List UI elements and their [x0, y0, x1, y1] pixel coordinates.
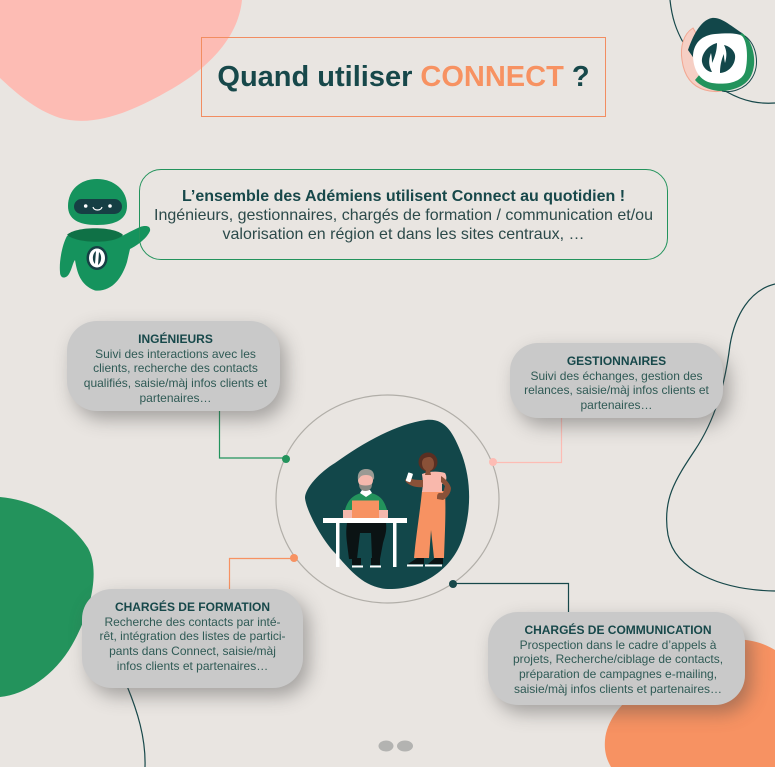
illustration: team at desk [305, 420, 469, 589]
seated man [343, 469, 388, 568]
robot badge [86, 246, 108, 270]
card: gestionnaires: GESTIONNAIRES [567, 354, 666, 368]
card: chargés de communication: Prospection dans le cadre d’appels à [520, 638, 716, 652]
blob: orange bottom right [605, 640, 775, 767]
connector: chargés de communication [449, 580, 568, 612]
card: gestionnaires: partenaires… [580, 398, 653, 412]
intro speech bubble: L’ensemble des Adémiens utilisent Connect au quotidien ! [182, 188, 625, 205]
dark blob [305, 420, 469, 589]
card: ingénieurs [67, 321, 280, 411]
card: gestionnaires [510, 343, 723, 418]
title: Quand utiliser CONNECT ? [217, 61, 590, 93]
card: chargés de communication: projets, Recherche/ciblage de contacts, [513, 652, 723, 666]
card: gestionnaires: relances, saisie/màj infos clients et [524, 383, 709, 397]
robot neck shadow [67, 228, 123, 242]
robot body [60, 226, 150, 291]
logo: dark layer [688, 18, 745, 60]
card: chargés de formation: CHARGÉS DE FORMATION [115, 600, 270, 614]
card: ingénieurs: partenaires… [139, 391, 212, 405]
card: chargés de formation: infos clients et partenaires… [117, 659, 268, 673]
card: chargés de formation [82, 589, 303, 688]
robot visor [74, 199, 122, 214]
intro speech bubble [139, 169, 668, 260]
card: chargés de formation: Recherche des contacts par inté- [104, 615, 281, 629]
card: chargés de communication: CHARGÉS DE COMMUNICATION [524, 623, 712, 637]
connector: chargés de formation [230, 554, 298, 589]
card: gestionnaires: Suivi des échanges, gestion des [530, 369, 703, 383]
circle outline [276, 395, 499, 603]
card: chargés de formation: rêt, intégration des listes de partici- [99, 629, 286, 643]
logo: white shape [693, 33, 747, 84]
card: ingénieurs: clients, recherche des contacts [93, 361, 258, 375]
logo top right [681, 18, 756, 92]
curve: top right [670, 0, 775, 103]
laptop [352, 500, 379, 518]
card: chargés de communication: préparation de campagnes e-mailing, [519, 667, 717, 681]
robot mascot [60, 179, 150, 291]
logo: outline [722, 36, 756, 92]
card: ingénieurs: Suivi des interactions avec les [95, 347, 256, 361]
card: chargés de formation: pants dans Connect, saisie/màj [109, 644, 276, 658]
curve: bottom left [127, 686, 145, 767]
connector: ingénieurs [220, 411, 290, 463]
card: chargés de communication [488, 612, 745, 705]
curve: right [667, 284, 775, 591]
logo: leaves [702, 43, 735, 73]
title [201, 37, 606, 117]
logo: green layer [695, 33, 754, 91]
connector: gestionnaires [489, 418, 562, 466]
pagination dots [378, 740, 413, 752]
card: ingénieurs: qualifiés, saisie/màj infos clients et [84, 376, 267, 390]
robot head [68, 179, 127, 225]
desk [323, 518, 407, 567]
card: ingénieurs: INGÉNIEURS [138, 332, 213, 346]
standing woman [405, 452, 451, 566]
logo: pink layer [681, 28, 727, 92]
card: chargés de communication: saisie/màj infos clients et partenaires… [514, 682, 722, 696]
blob: green left [0, 497, 94, 697]
intro speech bubble: valorisation en région et dans les sites centraux, … [223, 226, 584, 243]
blob: pink top left [0, 0, 242, 121]
intro speech bubble: Ingénieurs, gestionnaires, chargés de formation / communication et/ou [154, 207, 653, 224]
